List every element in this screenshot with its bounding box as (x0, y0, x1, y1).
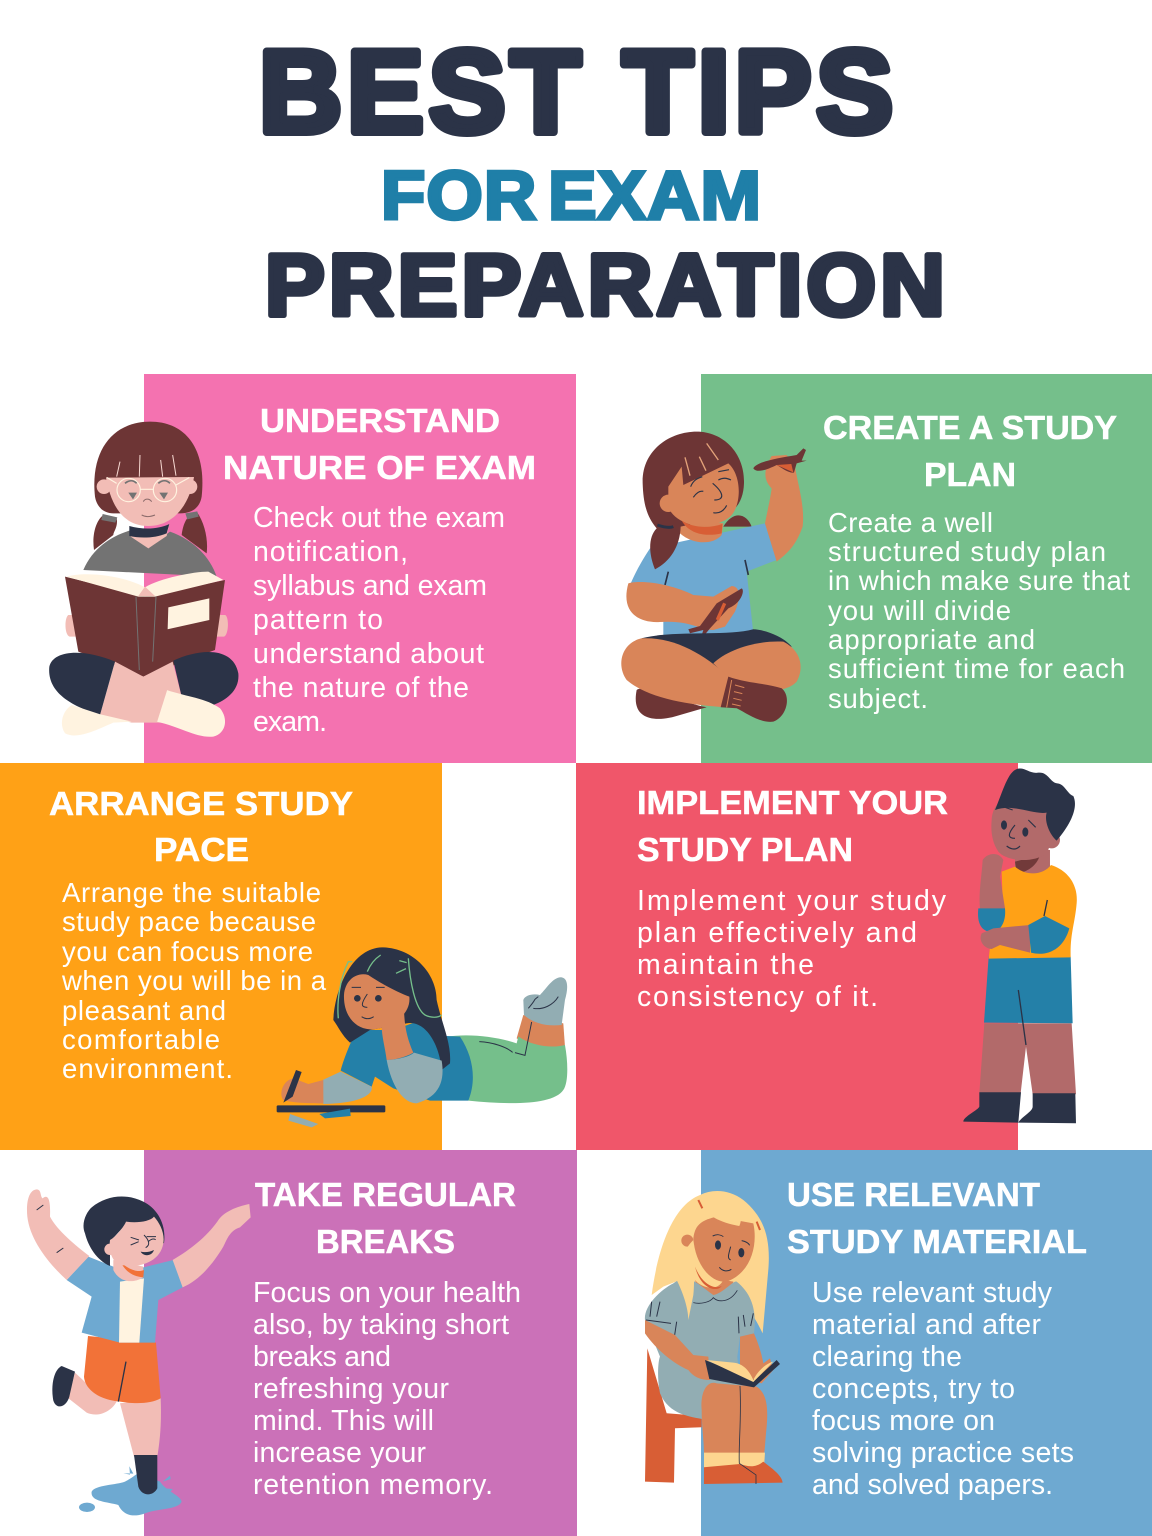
text: implement your study plan: plan effectively and (637, 917, 917, 949)
icon: boy jumping in a puddle (27, 1189, 251, 1515)
text: understand nature of exam: exam. (253, 706, 327, 738)
text: use relevant study material: Use relevant study (812, 1277, 1053, 1309)
text: create a study plan: appropriate and (828, 624, 1035, 655)
icon: girl sitting on a chair reading (645, 1191, 783, 1484)
heading: implement your study plan: STUDY PLAN (637, 832, 853, 869)
text: create a study plan: sufficient time for each (828, 653, 1125, 684)
heading: create a study plan: PLAN (924, 457, 1016, 494)
heading: understand nature of exam: UNDERSTAND (260, 403, 500, 440)
text: create a study plan: Create a well (828, 507, 993, 538)
heading: create a study plan (823, 410, 1117, 494)
text: use relevant study material: material and after (812, 1309, 1042, 1341)
text: create a study plan (828, 507, 1130, 714)
heading: implement your study plan (637, 785, 948, 869)
text: create a study plan: subject. (828, 683, 928, 714)
text: use relevant study material: solving practice sets (812, 1437, 1074, 1469)
text: understand nature of exam: the nature of the (253, 672, 469, 704)
text: arrange study pace: Arrange the suitable (62, 877, 321, 908)
title: BEST TIPS (259, 26, 898, 157)
text: take regular breaks: breaks and (253, 1341, 391, 1373)
icon: girl reading a book (49, 422, 238, 737)
panel: create a study plan (621, 374, 1152, 763)
panel: arrange study pace (0, 763, 567, 1150)
text: create a study plan: in which make sure that (828, 565, 1130, 596)
heading: understand nature of exam: NATURE OF EXAM (223, 450, 536, 487)
heading: use relevant study material: USE RELEVANT (787, 1177, 1041, 1214)
heading: use relevant study material (787, 1177, 1087, 1261)
text: arrange study pace: study pace because (62, 906, 316, 937)
heading: implement your study plan: IMPLEMENT YOUR (637, 785, 948, 822)
icon: girl playing with toy planes (621, 432, 807, 722)
icon: girl lying down and drawing (277, 947, 567, 1127)
heading: arrange study pace (49, 786, 353, 869)
text: use relevant study material: and solved papers. (812, 1469, 1053, 1501)
text: understand nature of exam: notification, (253, 536, 408, 568)
text: use relevant study material (812, 1277, 1074, 1501)
heading: understand nature of exam (223, 403, 536, 487)
text: take regular breaks: Focus on your health (253, 1277, 521, 1309)
title: PREPARATION (265, 237, 949, 334)
text: implement your study plan (637, 885, 947, 1013)
text: understand nature of exam: pattern to (253, 604, 383, 636)
text: take regular breaks: mind. This will (253, 1405, 434, 1437)
heading: take regular breaks (255, 1177, 516, 1261)
heading: take regular breaks: BREAKS (316, 1224, 455, 1261)
panel: understand nature of exam (49, 374, 576, 763)
text: take regular breaks: also, by taking short (253, 1309, 509, 1341)
text: create a study plan: you will divide (828, 595, 1011, 626)
text: create a study plan: structured study plan (828, 536, 1106, 567)
heading: arrange study pace: ARRANGE STUDY (49, 786, 353, 823)
text: understand nature of exam: understand about (253, 638, 484, 670)
heading: use relevant study material: STUDY MATERIAL (787, 1224, 1087, 1261)
text: implement your study plan: Implement your study (637, 885, 947, 917)
text: arrange study pace (61, 877, 327, 1084)
text: understand nature of exam: syllabus and exam (253, 570, 487, 602)
text: use relevant study material: focus more on (812, 1405, 995, 1437)
text: understand nature of exam: Check out the exam (253, 502, 505, 534)
text: arrange study pace: comfortable (62, 1024, 220, 1055)
heading: take regular breaks: TAKE REGULAR (255, 1177, 516, 1214)
text: take regular breaks: increase your (253, 1437, 426, 1469)
text: arrange study pace: you can focus more (62, 936, 313, 967)
heading: arrange study pace: PACE (154, 832, 249, 869)
text: take regular breaks (253, 1277, 521, 1501)
text: arrange study pace: when you will be in a (61, 965, 327, 996)
panel: take regular breaks (27, 1150, 577, 1536)
title (259, 26, 949, 334)
text: take regular breaks: retention memory. (253, 1469, 493, 1501)
panel: use relevant study material (645, 1150, 1152, 1536)
text: implement your study plan: maintain the (637, 949, 814, 981)
text: arrange study pace: environment. (62, 1053, 233, 1084)
text: take regular breaks: refreshing your (253, 1373, 450, 1405)
text: understand nature of exam (253, 502, 505, 738)
panel: implement your study plan (576, 763, 1077, 1150)
icon: boy thinking (963, 768, 1077, 1123)
heading: create a study plan: CREATE A STUDY (823, 410, 1117, 447)
text: use relevant study material: concepts, try to (812, 1373, 1015, 1405)
text: implement your study plan: consistency of it. (637, 981, 878, 1013)
text: use relevant study material: clearing the (812, 1341, 962, 1373)
text: arrange study pace: pleasant and (62, 995, 226, 1026)
title: FOR EXAM (381, 157, 762, 234)
